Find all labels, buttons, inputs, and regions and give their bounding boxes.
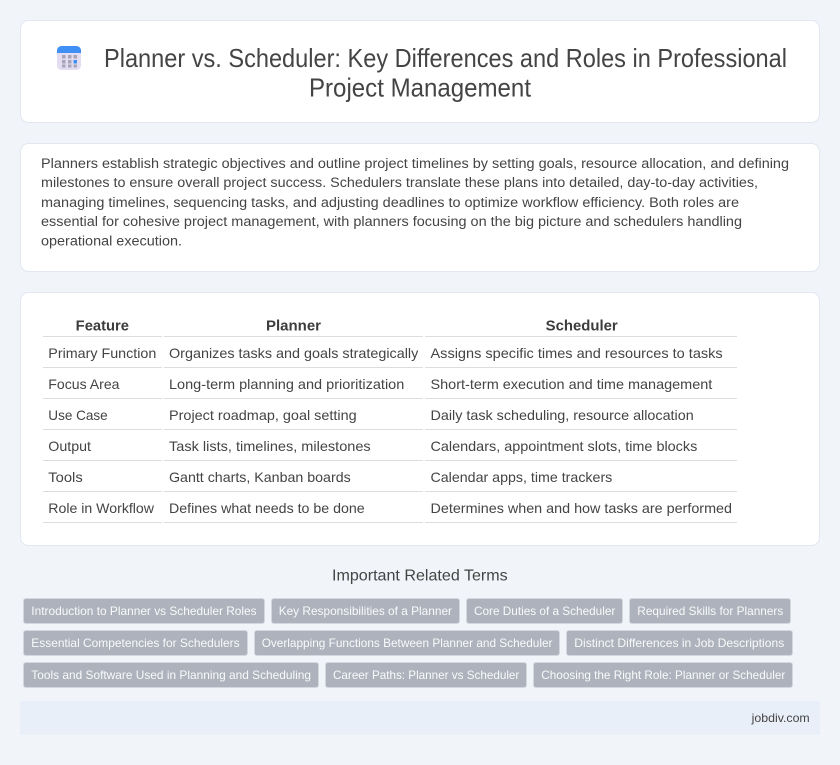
title: Planner vs. Scheduler: Key Differences and Roles in Professional <box>104 45 787 73</box>
table row: role in workflow: Determines when and how tasks are performed <box>430 500 732 516</box>
icon: calendar <box>57 46 81 70</box>
related terms tags <box>24 598 792 688</box>
tag: core duties: Core Duties of a Scheduler <box>474 604 615 618</box>
table row: focus area: Long-term planning and prioritization <box>169 376 404 392</box>
tag: career paths <box>326 662 526 688</box>
table row: tools: Gantt charts, Kanban boards <box>169 469 351 485</box>
tag: core duties <box>466 598 622 624</box>
tag: overlapping functions: Overlapping Functions Between Planner and Scheduler <box>262 636 552 650</box>
table row: tools: Calendar apps, time trackers <box>430 469 612 485</box>
tag: required skills: Required Skills for Planners <box>637 604 783 618</box>
text block: introduction paragraph: essential for cohesive project management, with planners focusing on the big picture and schedulers handling <box>41 214 742 230</box>
tag: introduction: Introduction to Planner vs Scheduler Roles <box>31 604 257 618</box>
footer <box>20 701 820 735</box>
table header row <box>43 318 737 337</box>
tag: key responsibilities: Key Responsibilities of a Planner <box>279 604 452 618</box>
text block: introduction paragraph <box>41 156 789 250</box>
table row: use case <box>43 407 737 430</box>
table row: use case: Daily task scheduling, resource allocation <box>430 407 694 423</box>
heading: important related terms: Important Related Terms <box>332 568 508 585</box>
panel: comparison table <box>20 292 820 546</box>
text block: introduction paragraph: milestones to ensure overall project success. Schedulers translate these plans into detailed, day-to-day activities, <box>41 175 758 191</box>
table row: use case: Project roadmap, goal setting <box>169 407 357 423</box>
panel: introduction <box>20 144 820 272</box>
text block: introduction paragraph: operational execution. <box>41 234 182 250</box>
tag: career paths: Career Paths: Planner vs Scheduler <box>333 668 519 682</box>
title <box>104 45 787 102</box>
title: Project Management <box>309 74 531 102</box>
table row: primary function: Primary Function <box>48 345 156 361</box>
table row: focus area <box>43 376 737 399</box>
tag: choosing the right role <box>534 662 792 688</box>
table row: use case: Use Case <box>48 407 108 423</box>
tag: overlapping functions <box>254 630 560 656</box>
table row: primary function: Assigns specific times and resources to tasks <box>430 345 723 361</box>
table row: role in workflow: Role in Workflow <box>48 500 155 516</box>
tag: tools and software: Tools and Software Used in Planning and Scheduling <box>31 668 311 682</box>
tag: distinct differences <box>566 630 792 656</box>
tag: choosing the right role: Choosing the Right Role: Planner or Scheduler <box>541 668 785 682</box>
table row: role in workflow: Defines what needs to be done <box>169 500 365 516</box>
text block: introduction paragraph: managing timelines, sequencing tasks, and adjusting deadlines to optimize workflow efficiency. Both roles are <box>41 195 739 211</box>
table row: tools: Tools <box>48 469 83 485</box>
table header row: Feature <box>76 318 129 334</box>
tag: tools and software <box>24 662 318 688</box>
tag: key responsibilities <box>272 598 460 624</box>
tag: essential competencies <box>24 630 248 656</box>
tag: distinct differences: Distinct Differences in Job Descriptions <box>574 636 784 650</box>
table row: focus area: Short-term execution and time management <box>430 376 712 392</box>
table row: primary function: Organizes tasks and goals strategically <box>169 345 418 361</box>
table row: output <box>43 438 737 461</box>
footer source text: jobdiv.com <box>751 711 810 725</box>
table row: primary function <box>43 345 737 368</box>
table row: output: Output <box>48 438 91 454</box>
tag: required skills <box>630 598 790 624</box>
table row: output: Calendars, appointment slots, time blocks <box>430 438 697 454</box>
table row: output: Task lists, timelines, milestones <box>169 438 371 454</box>
table row: focus area: Focus Area <box>48 376 120 392</box>
table row: tools <box>43 469 737 492</box>
text block: introduction paragraph: Planners establish strategic objectives and outline project timelines by setting goals, resource allocation, and defining <box>41 156 789 172</box>
table header row: Planner <box>266 318 321 334</box>
tag: essential competencies: Essential Competencies for Schedulers <box>31 636 240 650</box>
tag: introduction <box>24 598 264 624</box>
panel: header <box>20 20 820 122</box>
table row: role in workflow <box>43 500 737 523</box>
table header row: Scheduler <box>546 318 618 334</box>
